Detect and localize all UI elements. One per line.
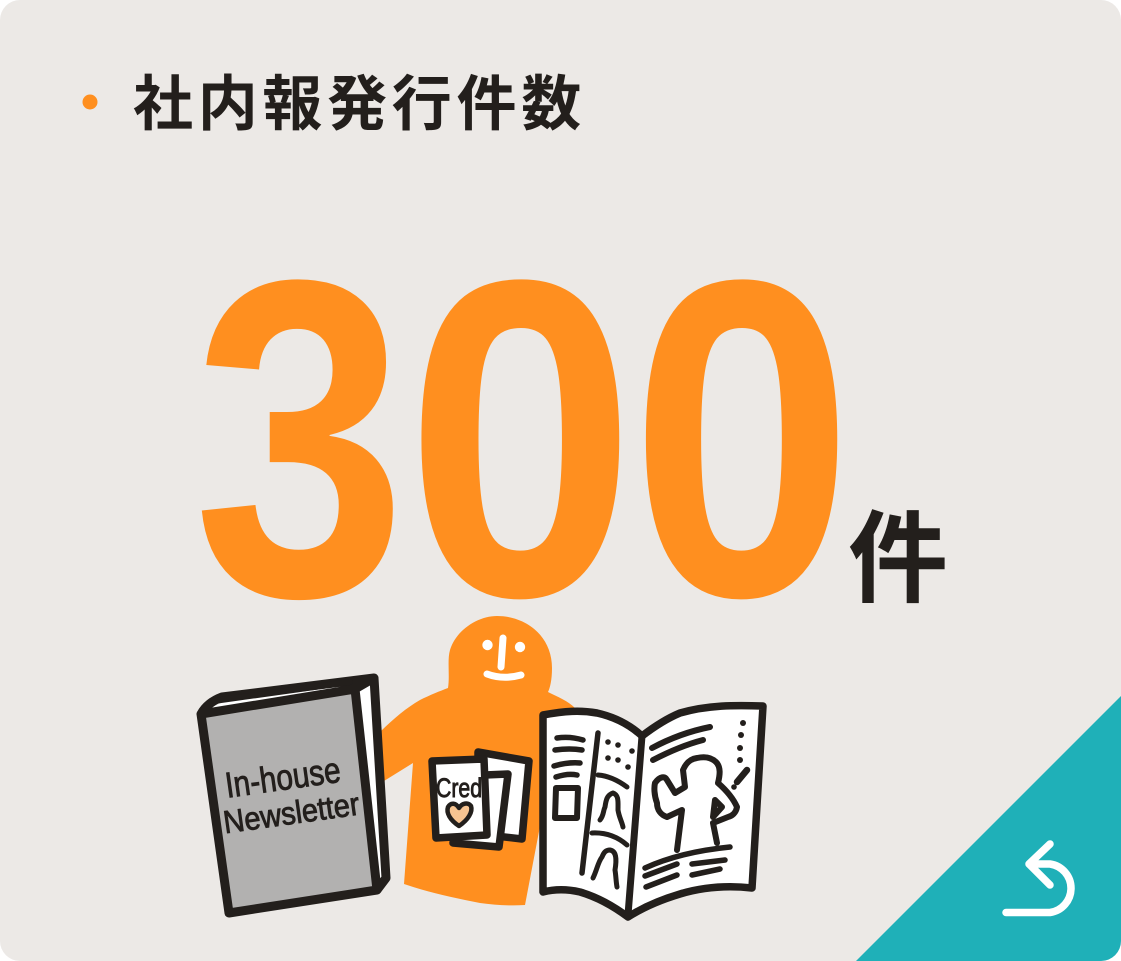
card text: Cred [436,773,482,803]
illustration: person holding newsletters [200,616,763,917]
right page marks [731,720,746,790]
teal triangle [856,696,1121,961]
big number: 300: 3 [193,186,407,691]
book title: In-house [222,749,343,806]
unit: 件: 件 [848,504,948,616]
big number: 300 [193,186,854,692]
icon: stacked credit cards [432,752,529,847]
face [482,638,525,677]
left page dots [605,739,635,770]
figure body [379,616,575,905]
big number: 300: 0 [405,187,636,692]
card heart [447,804,471,826]
big number: 300: 0 [630,186,854,691]
icon: book [200,678,387,913]
icon: open magazine [543,706,763,917]
icon: return arrow [1006,844,1071,912]
magazine person [654,757,737,850]
book title: Newsletter [221,786,362,840]
title: 社内報発行件数 [133,71,586,138]
bullet dot [82,94,98,110]
back corner button [856,696,1121,961]
book title [216,747,362,840]
